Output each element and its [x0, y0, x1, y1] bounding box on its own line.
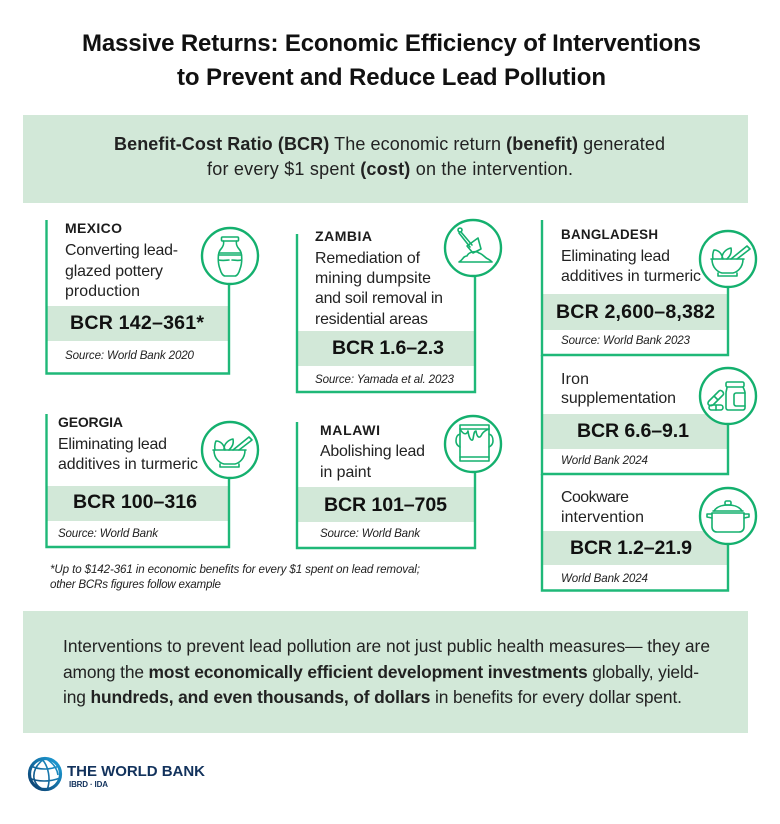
panel: Malawi: BCR 101–705 [324, 494, 447, 516]
title: to Prevent and Reduce Lead Pollution [177, 64, 606, 91]
panel: iron supplementation: Iron [561, 371, 589, 388]
panel: Mexico: MEXICO [65, 220, 122, 236]
footnote: *Up to $142-361 in economic benefits for every $1 spent on lead removal; [50, 563, 420, 576]
panel: Mexico: production [65, 283, 140, 300]
panel: BCR definition [23, 115, 748, 203]
panel: Malawi: in paint [320, 464, 372, 481]
footnote [50, 563, 420, 591]
panel: Georgia [46, 414, 258, 547]
panel: iron supplementation: BCR 6.6–9.1 [577, 420, 689, 442]
panel: Georgia: additives in turmeric [58, 456, 198, 473]
panel: Bangladesh: additives in turmeric [561, 268, 701, 285]
panel: Zambia [297, 220, 501, 392]
icon: paint bucket [445, 416, 501, 472]
panel: Zambia: Remediation of [315, 250, 421, 267]
panel: Georgia: Eliminating lead [58, 436, 167, 453]
panel: Zambia: ZAMBIA [315, 228, 372, 244]
panel: iron supplementation: World Bank 2024 [561, 454, 649, 467]
logo: The World Bank [29, 758, 205, 790]
icon: shovel and soil [445, 220, 501, 276]
logo: The World Bank: THE WORLD BANK [67, 763, 205, 780]
title: Massive Returns: Economic Efficiency of Interventions [82, 30, 701, 57]
panel: BCR definition: Benefit-Cost Ratio (BCR) The economic return (benefit) generated [114, 134, 665, 154]
panel: Zambia: Source: Yamada et al. 2023 [315, 373, 455, 386]
panel: conclusion: Interventions to prevent lead pollution are not just public health measures— they are [63, 636, 710, 656]
panel: conclusion [23, 611, 748, 733]
logo: The World Bank: IBRD · IDA [69, 780, 108, 789]
icon: mortar and pestle [700, 231, 756, 287]
panel: Zambia: mining dumpsite [315, 270, 431, 287]
panel: cookware intervention: Cookware [561, 489, 629, 506]
panel: iron supplementation: supplementation [561, 390, 676, 407]
footnote: other BCRs figures follow example [50, 578, 222, 591]
panel: Georgia: GEORGIA [58, 414, 123, 430]
panel: Malawi: Source: World Bank [320, 527, 421, 540]
panel: Mexico: glazed pottery [65, 263, 163, 280]
panel: Malawi: Abolishing lead [320, 443, 425, 460]
panel: Georgia: Source: World Bank [58, 527, 159, 540]
panel: Mexico: BCR 142–361* [70, 312, 204, 334]
title [82, 30, 701, 91]
panel: cookware intervention [542, 474, 756, 590]
panel: BCR definition: for every $1 spent (cost) on the intervention. [207, 159, 573, 179]
icon: cooking pot [700, 488, 756, 544]
panel: conclusion: ing hundreds, and even thousands, of dollars in benefits for every dollar spent. [63, 687, 682, 707]
panel: cookware intervention: BCR 1.2–21.9 [570, 537, 692, 559]
icon: supplements [700, 368, 756, 424]
panel: Mexico: Converting lead- [65, 242, 178, 259]
panel: cookware intervention: World Bank 2024 [561, 572, 649, 585]
panel: Georgia: BCR 100–316 [73, 491, 197, 513]
panel: Bangladesh: BCR 2,600–8,382 [556, 301, 715, 323]
panel: iron supplementation [542, 355, 756, 474]
panel: Bangladesh: BANGLADESH [561, 227, 658, 242]
panel: Malawi: MALAWI [320, 422, 380, 438]
panel: Malawi [297, 416, 501, 548]
panel: Zambia: and soil removal in [315, 290, 443, 307]
icon: pottery vase [202, 228, 258, 284]
panel: Bangladesh [542, 220, 756, 355]
panel: Mexico: Source: World Bank 2020 [65, 349, 195, 362]
panel: Bangladesh: Source: World Bank 2023 [561, 334, 691, 347]
panel: Bangladesh: Eliminating lead [561, 248, 670, 265]
icon: globe [29, 758, 60, 790]
icon: mortar and pestle [202, 422, 258, 478]
panel: Zambia: BCR 1.6–2.3 [332, 337, 444, 359]
panel: cookware intervention: intervention [561, 509, 644, 526]
panel: conclusion: among the most economically efficient development investments globally, yield- [63, 662, 699, 682]
panel: Zambia: residential areas [315, 311, 428, 328]
panel: Mexico [46, 220, 258, 374]
